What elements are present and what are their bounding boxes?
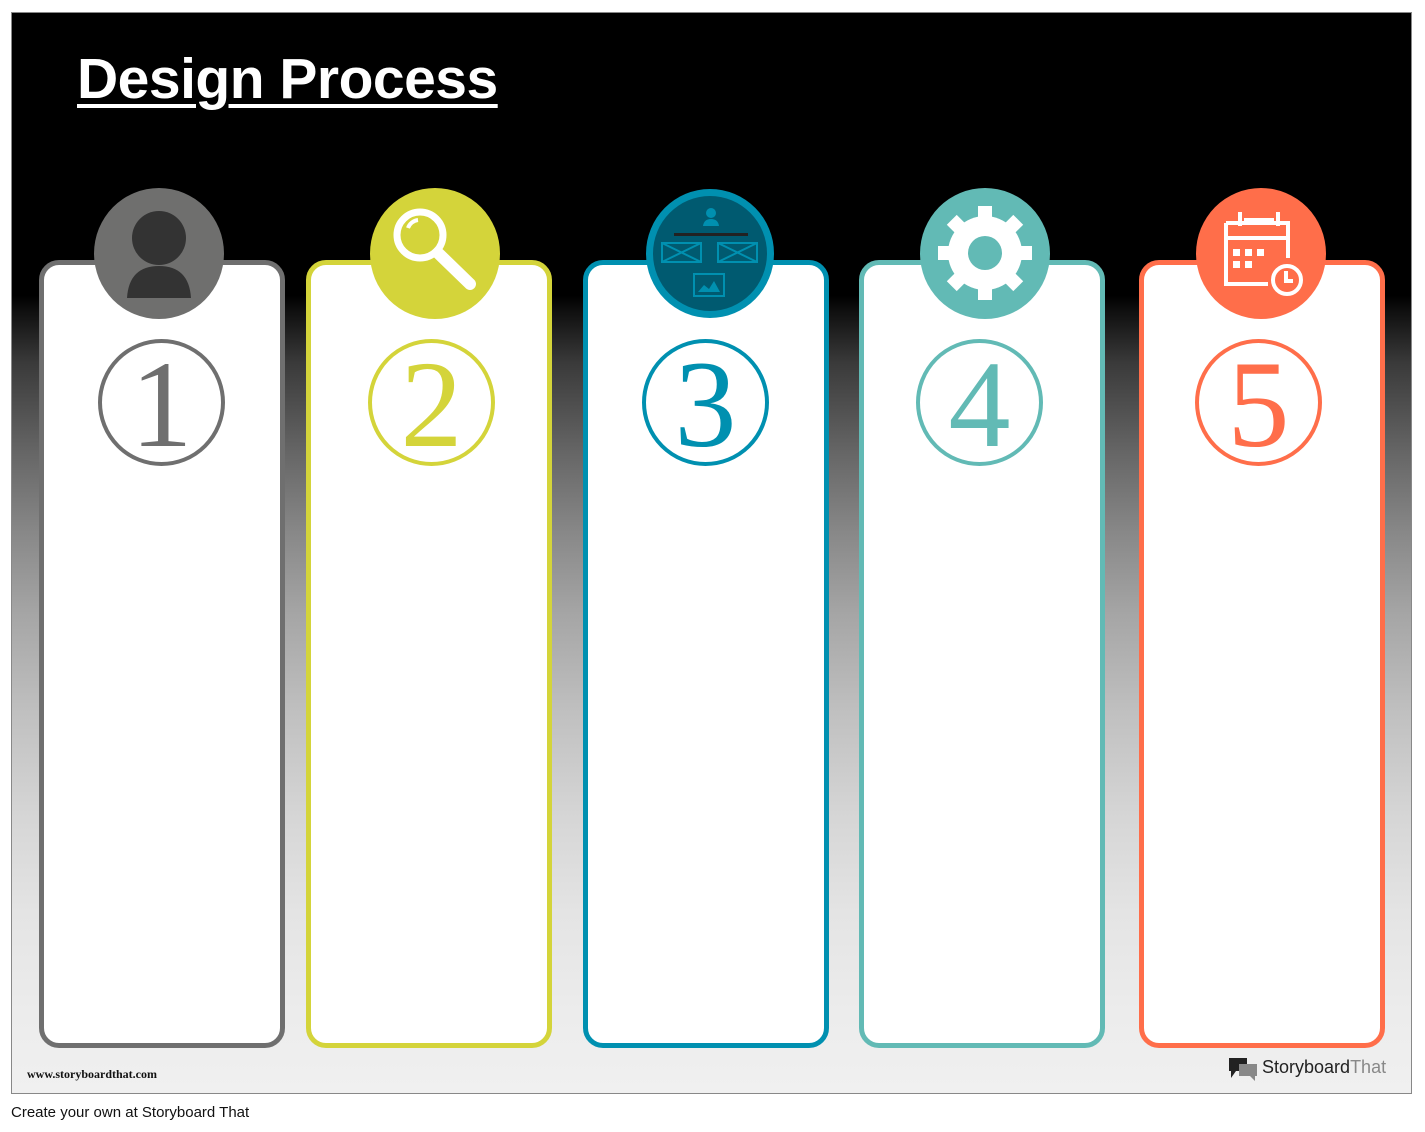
icon: user [94, 188, 224, 319]
number 5: 5 [1228, 336, 1290, 473]
number 1: 1 [130, 336, 192, 473]
card 5 [1139, 260, 1385, 1048]
icon: gear [920, 188, 1050, 319]
number 2 [368, 339, 495, 466]
bottom caption: Create your own at Storyboard That [11, 1104, 249, 1121]
number 2: 2 [400, 336, 462, 473]
logo [1229, 1057, 1386, 1081]
number 3: 3 [674, 336, 736, 473]
icon: calendar [1196, 188, 1326, 319]
number 4 [916, 339, 1043, 466]
icon: magnifier [370, 188, 500, 319]
number 5 [1195, 339, 1322, 466]
icon: wireframe [646, 189, 774, 318]
number 3 [642, 339, 769, 466]
card 1 [39, 260, 285, 1048]
number 1 [98, 339, 225, 466]
footer url: www.storyboardthat.com [27, 1067, 157, 1081]
card 3 [583, 260, 829, 1048]
card 4 [859, 260, 1105, 1048]
title: Design Process [77, 47, 498, 111]
card 2 [306, 260, 552, 1048]
logo: StoryboardThat [1262, 1057, 1386, 1077]
number 4: 4 [948, 336, 1010, 473]
